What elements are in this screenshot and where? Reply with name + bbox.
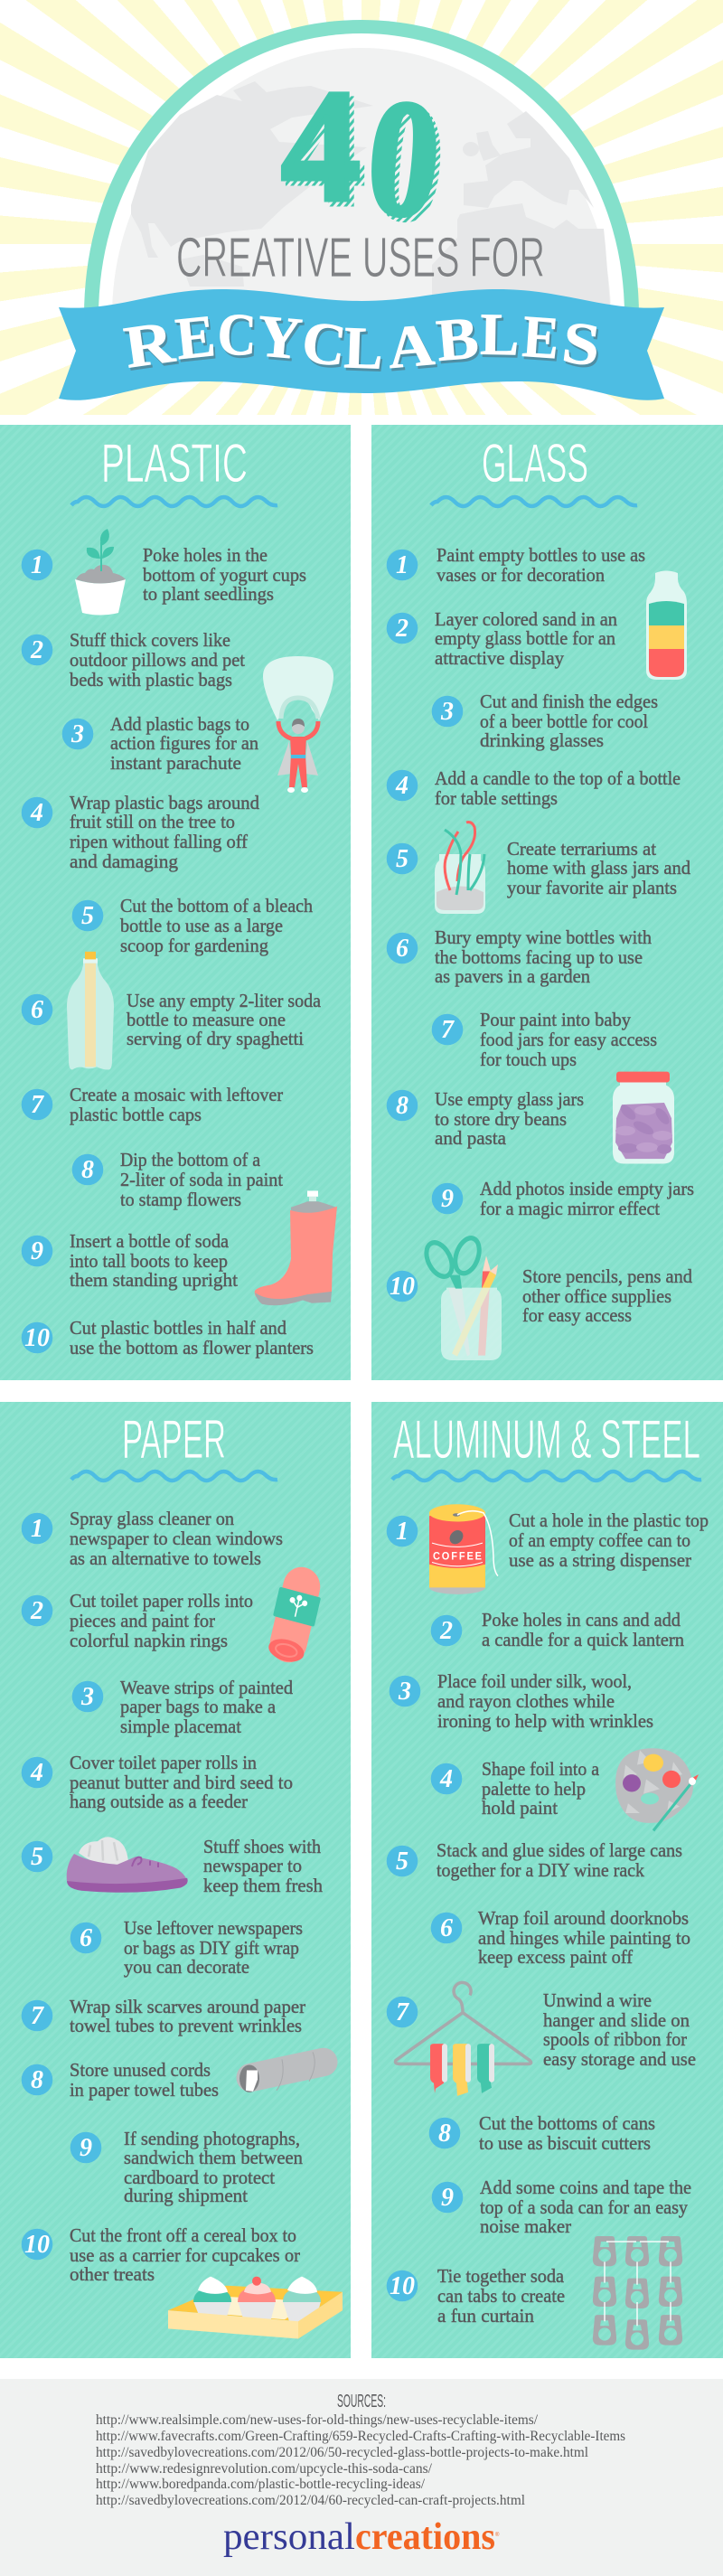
tip 6 <box>431 1907 690 1968</box>
sunburst background <box>0 0 723 415</box>
icon: soda can tab curtain <box>593 2236 682 2350</box>
tip 7: Wrap silk scarves around paper <box>70 1996 305 2017</box>
tip 10: 10 <box>390 1273 415 1301</box>
icon: cupcakes in cereal box carrier <box>168 2277 343 2338</box>
icon: bottle measuring spaghetti <box>67 952 114 1070</box>
tip 5 <box>72 895 313 956</box>
wave divider <box>431 497 637 506</box>
tip 10: other office supplies <box>522 1285 671 1307</box>
tip 9 <box>22 1230 238 1291</box>
tip 10: can tabs to create <box>437 2285 565 2307</box>
banner title: A <box>385 312 437 381</box>
tip 1: Poke holes in the <box>143 544 268 566</box>
tip 1: 1 <box>396 551 408 579</box>
tip 6: 6 <box>80 1924 92 1952</box>
tip 5: 5 <box>81 902 94 930</box>
tip 9: Add some coins and tape the <box>480 2176 691 2198</box>
tip 7: plastic bottle caps <box>70 1104 202 1125</box>
tip 4: hang outside as a feeder <box>70 1791 248 1812</box>
tip 5 <box>387 1839 682 1881</box>
banner title: B <box>434 305 481 374</box>
tip 8: to stamp flowers <box>120 1189 241 1210</box>
tip 1 <box>22 1508 283 1569</box>
tip 2: Cut toilet paper rolls into <box>70 1590 253 1612</box>
tip 3 <box>62 713 258 774</box>
tip 5: 5 <box>396 1847 408 1876</box>
icon: rolled napkin with ring <box>264 1562 326 1668</box>
personal creations logo <box>223 2516 500 2558</box>
tip 2 <box>22 629 245 691</box>
tip 4: 4 <box>439 1765 453 1793</box>
tip 2: Layer colored sand in an <box>435 608 617 630</box>
wave divider <box>392 1471 701 1481</box>
tip 9: top of a soda can for an easy <box>480 2196 688 2218</box>
tip 10: Cut the front off a cereal box to <box>70 2224 296 2246</box>
number 40 <box>281 56 451 258</box>
tip 9: 9 <box>31 1237 43 1265</box>
tip 9: cardboard to protect <box>124 2167 275 2188</box>
tip 2: a candle for a quick lantern <box>482 1629 684 1650</box>
tip 3 <box>390 1670 653 1732</box>
footer <box>0 2379 723 2576</box>
tip 9: Add photos inside empty jars <box>480 1178 694 1199</box>
tip 6: Bury empty wine bottles with <box>435 926 652 948</box>
tip 6: as pavers in a garden <box>435 965 590 987</box>
tip 4: hold paint <box>482 1797 558 1819</box>
icon: action figure with plastic bag parachute <box>263 656 333 793</box>
tip 3: ironing to help with wrinkles <box>437 1710 653 1732</box>
tip 8: to use as biscuit cutters <box>479 2132 651 2154</box>
tip 3: Weave strips of painted <box>120 1677 293 1698</box>
tip 2: beds with plastic bags <box>70 669 232 691</box>
tip 6: keep excess paint off <box>478 1946 633 1968</box>
tip 10: other treats <box>70 2263 155 2285</box>
tip 2: 2 <box>30 1597 43 1625</box>
tip 4: 4 <box>30 1759 43 1787</box>
tip 9: If sending photographs, <box>124 2128 300 2149</box>
tip 4: peanut butter and bird seed to <box>70 1772 293 1793</box>
ribbon banner <box>59 289 664 400</box>
tip 10: for easy access <box>522 1304 632 1326</box>
tip 9 <box>432 2176 691 2237</box>
icon: jar of dry beans <box>613 1072 674 1163</box>
tip 8: Store unused cords <box>70 2059 211 2081</box>
tip 6: Use leftover newspapers <box>124 1917 303 1939</box>
tip 6 <box>70 1917 303 1978</box>
tip 3: drinking glasses <box>480 729 604 751</box>
tip 5: Create terrariums at <box>507 838 656 860</box>
tip 4: and damaging <box>70 851 178 872</box>
tip 2: 2 <box>30 636 43 664</box>
tip 10: 10 <box>390 2272 415 2300</box>
tip 9: 9 <box>441 1185 454 1213</box>
tip 4 <box>431 1758 600 1819</box>
tip 6: and hinges while painting to <box>478 1927 690 1949</box>
tip 2 <box>22 1590 253 1651</box>
banner title: L <box>480 302 520 368</box>
tip 10: 10 <box>24 2231 50 2259</box>
banner title: L <box>343 315 384 382</box>
tip 8: 8 <box>31 2066 43 2094</box>
icon: seedling in yogurt cup <box>75 529 126 615</box>
tip 7: towel tubes to prevent wrinkles <box>70 2015 302 2036</box>
personal creations logo: personal <box>223 2516 355 2558</box>
tip 7 <box>22 1084 283 1125</box>
tip 1: use as a string dispenser <box>509 1549 691 1571</box>
tip 4 <box>22 792 259 872</box>
sources list <box>96 2412 625 2508</box>
tip 3: instant parachute <box>110 752 241 774</box>
sources list: http://www.favecrafts.com/Green-Crafting/659-Recycled-Crafts-Crafting-with-Recyclable-Items <box>96 2429 625 2444</box>
tip 1: bottom of yogurt cups <box>143 564 306 586</box>
tip 1: to plant seedlings <box>143 583 274 605</box>
tip 7 <box>387 1989 696 2070</box>
tip 5: home with glass jars and <box>507 857 690 879</box>
tip 4: Cover toilet paper rolls in <box>70 1752 257 1773</box>
tip 6: bottle to measure one <box>127 1009 286 1030</box>
personal creations logo: ® <box>495 2532 500 2538</box>
icon: boot with soda bottle <box>255 1190 337 1305</box>
tip 8: to store dry beans <box>435 1108 567 1130</box>
icon: cords in paper towel tube <box>239 2052 324 2092</box>
tip 4: Shape foil into a <box>482 1758 600 1780</box>
wave divider <box>71 1471 277 1481</box>
icon: shoe stuffed with newspaper <box>67 1837 188 1893</box>
tip 8: in paper towel tubes <box>70 2079 219 2101</box>
tip 9: noise maker <box>480 2215 571 2237</box>
tip 7: 7 <box>31 2002 44 2030</box>
tip 6: 6 <box>396 935 408 963</box>
tip 2 <box>431 1609 684 1650</box>
number 40: 0 <box>365 68 451 258</box>
sources heading: SOURCES: <box>337 2392 386 2411</box>
tip 9: sandwich them between <box>124 2147 303 2168</box>
tip 5: together for a DIY wine rack <box>437 1859 644 1881</box>
tip 8 <box>387 1088 584 1149</box>
sources list: http://savedbylovecreations.com/2012/04/60-recycled-can-craft-projects.html <box>96 2493 525 2508</box>
banner title: R <box>120 309 179 381</box>
tip 1 <box>22 544 306 605</box>
tip 8: 2-liter of soda in paint <box>120 1169 283 1190</box>
icon: coffee can string dispenser: COFFEE <box>433 1551 482 1562</box>
tip 8: Use empty glass jars <box>435 1088 584 1110</box>
heading: plastic: PLASTIC <box>101 433 248 494</box>
tip 6: or bags as DIY gift wrap <box>124 1937 299 1959</box>
panel: aluminum and steel <box>371 1402 723 2358</box>
tip 2: 2 <box>439 1617 453 1645</box>
tip 10: 10 <box>24 1324 50 1352</box>
tip 5: 5 <box>31 1843 43 1871</box>
tip 8 <box>429 2112 655 2154</box>
tip 3: and rayon clothes while <box>437 1690 615 1712</box>
tip 2: outdoor pillows and pet <box>70 649 245 671</box>
tip 9 <box>432 1178 694 1219</box>
tip 1: 1 <box>31 551 43 579</box>
tip 9: into tall boots to keep <box>70 1250 228 1272</box>
tip 7: for touch ups <box>480 1048 577 1070</box>
tip 10 <box>22 1317 314 1359</box>
tip 1 <box>387 544 645 586</box>
sources list: http://www.boredpanda.com/plastic-bottle-recycling-ideas/ <box>96 2477 426 2492</box>
tip 7: easy storage and use <box>543 2048 696 2070</box>
tip 2: Stuff thick covers like <box>70 629 230 651</box>
tip 2: 2 <box>395 615 408 643</box>
tip 7: 7 <box>441 1016 455 1044</box>
panel: glass <box>371 425 723 1380</box>
sources list: http://www.redesignrevolution.com/upcycle-this-soda-cans/ <box>96 2461 433 2477</box>
tip 7: food jars for easy access <box>480 1029 657 1050</box>
tip 9: Insert a bottle of soda <box>70 1230 230 1252</box>
tip 3: paper bags to make a <box>120 1696 277 1717</box>
tip 8: Cut the bottoms of cans <box>479 2112 655 2134</box>
tip 10: Tie together soda <box>437 2265 565 2287</box>
number 40: 0 <box>361 63 447 253</box>
tip 2: empty glass bottle for an <box>435 627 615 649</box>
globe <box>112 48 611 316</box>
tip 8: 8 <box>396 1092 408 1120</box>
wave divider <box>71 497 277 506</box>
tip 3: action figures for an <box>110 732 258 754</box>
tip 7: Create a mosaic with leftover <box>70 1084 283 1105</box>
tip 1: newspaper to clean windows <box>70 1528 283 1549</box>
tip 3: Place foil under silk, wool, <box>437 1670 632 1692</box>
tip 4: for table settings <box>435 787 558 809</box>
tip 1: vases or for decoration <box>437 564 605 586</box>
tip 8 <box>72 1149 283 1210</box>
tip 5: newspaper to <box>203 1855 302 1876</box>
tip 3: of a beer bottle for cool <box>480 710 648 732</box>
tip 4: ripen without falling off <box>70 831 248 852</box>
tip 6: 6 <box>440 1914 453 1942</box>
banner title: C <box>216 301 258 369</box>
tip 5 <box>22 1836 323 1896</box>
tip 1: Spray glass cleaner on <box>70 1508 234 1529</box>
tip 5: your favorite air plants <box>507 877 677 898</box>
tip 8: 8 <box>438 2120 451 2148</box>
tip 4 <box>387 767 681 809</box>
header badge <box>59 20 664 400</box>
tip 7: Unwind a wire <box>543 1989 652 2011</box>
banner title: E <box>173 303 218 372</box>
tip 3: 3 <box>398 1678 411 1706</box>
tip 6 <box>22 990 322 1049</box>
tip 5: Stack and glue sides of large cans <box>437 1839 682 1861</box>
tip 7: Pour paint into baby <box>480 1009 631 1030</box>
icon: foil paint palette <box>615 1748 699 1830</box>
tip 7: hanger and slide on <box>543 2009 690 2031</box>
banner title: S <box>559 309 604 379</box>
sources list: http://savedbylovecreations.com/2012/06/50-recycled-glass-bottle-projects-to-make.html <box>96 2445 588 2460</box>
tip 6: Use any empty 2-liter soda <box>127 990 322 1011</box>
tip 4: fruit still on the tree to <box>70 811 235 832</box>
tip 10 <box>387 1265 692 1326</box>
tip 3: 3 <box>440 698 454 726</box>
tip 4 <box>22 1752 293 1812</box>
tip 1: as an alternative to towels <box>70 1547 261 1569</box>
tip 3: 3 <box>70 720 84 748</box>
banner title: Y <box>255 303 305 372</box>
icon: wire hanger with ribbon spools <box>396 1982 531 2096</box>
tip 6: the bottoms facing up to use <box>435 946 643 968</box>
tip 5: bottle to use as a large <box>120 915 283 936</box>
tip 9: them standing upright <box>70 1269 238 1291</box>
icon: office supplies in a jar <box>421 1235 502 1360</box>
banner title: E <box>521 304 561 371</box>
tip 6 <box>387 926 652 987</box>
tip 3 <box>432 691 658 751</box>
tip 10: use the bottom as flower planters <box>70 1337 314 1359</box>
tip 7 <box>22 1996 305 2036</box>
tip 10: Cut plastic bottles in half and <box>70 1317 286 1339</box>
tip 8: and pasta <box>435 1127 507 1149</box>
heading: glass: GLASS <box>482 433 588 494</box>
number 40: 4 <box>281 56 361 235</box>
tip 10: Store pencils, pens and <box>522 1265 692 1287</box>
tip 1: 1 <box>31 1515 43 1543</box>
tip 7 <box>432 1009 657 1070</box>
tip 3: Cut and finish the edges <box>480 691 658 712</box>
tip 9: during shipment <box>124 2185 248 2206</box>
tip 3 <box>72 1677 293 1737</box>
tip 6: serving of dry spaghetti <box>127 1028 304 1049</box>
icon: terrarium jar <box>435 823 485 914</box>
icon: bottle of colored sand <box>646 571 687 680</box>
tip 7: 7 <box>31 1091 44 1119</box>
tip 1: of an empty coffee can to <box>509 1529 690 1551</box>
tip 8 <box>22 2059 219 2101</box>
tip 2: pieces and paint for <box>70 1610 215 1631</box>
tip 4: 4 <box>395 772 408 800</box>
tip 1: Cut a hole in the plastic top <box>509 1509 709 1531</box>
icon: coffee can string dispenser <box>429 1504 498 1594</box>
tip 4: Add a candle to the top of a bottle <box>435 767 681 789</box>
tip 1 <box>387 1509 709 1571</box>
tip 6: 6 <box>31 996 43 1024</box>
tip 5 <box>387 838 690 898</box>
tip 3: simple placemat <box>120 1716 241 1737</box>
tip 9 <box>70 2128 303 2206</box>
tip 6: Wrap foil around doorknobs <box>478 1907 689 1929</box>
tip 5: Stuff shoes with <box>203 1836 321 1857</box>
arch white ring <box>99 33 624 316</box>
tip 8: Dip the bottom of a <box>120 1149 261 1170</box>
tip 10: use as a carrier for cupcakes or <box>70 2244 300 2266</box>
tip 3: Add plastic bags to <box>110 713 249 735</box>
personal creations logo: creations <box>355 2516 495 2558</box>
tip 10 <box>22 2224 300 2285</box>
tip 9: 9 <box>441 2184 454 2212</box>
tip 5: scoop for gardening <box>120 935 268 956</box>
number 40: 4 <box>286 61 365 240</box>
panel: paper <box>0 1402 351 2358</box>
tip 10 <box>387 2265 565 2327</box>
tip 9: 9 <box>80 2134 92 2162</box>
tip 5: keep them fresh <box>203 1875 323 1896</box>
tip 1: 1 <box>396 1518 408 1546</box>
tip 5: 5 <box>396 845 408 873</box>
tip 9: for a magic mirror effect <box>480 1198 660 1219</box>
tip 6: you can decorate <box>124 1956 249 1978</box>
tip 7: 7 <box>396 1998 409 2026</box>
tip 3: 3 <box>80 1683 94 1711</box>
tip 4: palette to help <box>482 1778 586 1800</box>
tip 2 <box>387 608 617 669</box>
heading: paper: PAPER <box>122 1409 226 1470</box>
tip 2: colorful napkin rings <box>70 1630 228 1651</box>
tip 4: Wrap plastic bags around <box>70 792 259 813</box>
banner title <box>120 301 604 382</box>
tip 2: Poke holes in cans and add <box>482 1609 681 1631</box>
banner title: C <box>298 309 350 380</box>
tip 7: spools of ribbon for <box>543 2028 687 2050</box>
tip 10: a fun curtain <box>437 2305 534 2327</box>
arch outer ring <box>84 20 639 316</box>
sources list: http://www.realsimple.com/new-uses-for-old-things/new-uses-recyclable-items/ <box>96 2412 539 2428</box>
tip 1: Paint empty bottles to use as <box>437 544 645 566</box>
panel: plastic <box>0 425 351 1380</box>
tip 4: 4 <box>30 799 43 827</box>
tip 2: attractive display <box>435 647 564 669</box>
tip 5: Cut the bottom of a bleach <box>120 895 313 917</box>
tip 8: 8 <box>81 1156 94 1184</box>
